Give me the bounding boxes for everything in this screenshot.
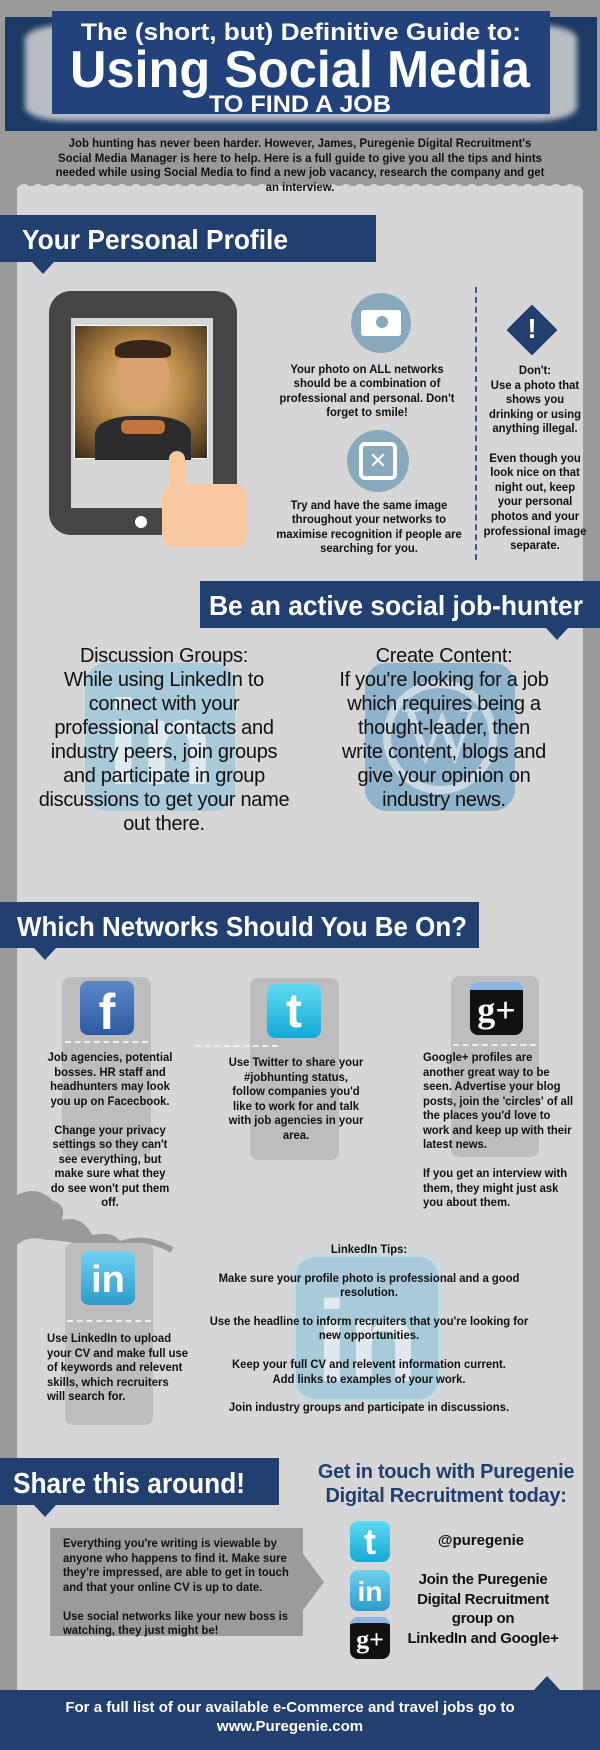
text: linkedin tips: resolution. [340,1285,398,1299]
linkedin block: skills, which recruiters [47,1374,169,1388]
text: don't: Use a photo that [491,378,579,392]
text: linkedin tips [210,1242,528,1414]
contact icons [350,1521,390,1659]
title text: The (short, but) Definitive Guide to: [81,19,521,46]
text: discussion groups: Discussion Groups: [80,645,248,667]
facebook block: make sure what they [55,1166,165,1180]
heading: get in touch [318,1461,574,1507]
icon: warning diamond [506,304,558,356]
icon: twitter small: t [364,1521,376,1562]
text: don't: shows you [506,392,564,406]
text: don't: look nice on that [490,465,580,479]
text: discussion groups: out there. [123,813,205,835]
text: photo combination: Your photo on ALL networks [290,362,444,376]
twitter block: #jobhunting status, [244,1070,348,1084]
google+ block: work and keep up with their [423,1122,572,1136]
title box [52,11,550,114]
title text [70,19,531,114]
text: discussion groups [39,645,289,835]
text: same image: searching for you. [320,541,418,555]
icon: twitter small [350,1521,390,1562]
intro text: an interview. [266,180,334,194]
text: linkedin tips: Join industry groups and participate in discussions. [229,1400,509,1414]
text: join group: Join the Puregenie [419,1571,547,1588]
twitter block: area. [283,1128,309,1142]
icon: google plus small: g+ [356,1625,384,1654]
twitter block: with job agencies in your [229,1113,363,1127]
text: don't: Even though you [489,451,581,465]
callout: share text box: they're impressed, are able to get in touch [63,1565,289,1579]
scalloped panel top [17,184,575,191]
callout: share text box: watching, they just might be! [63,1623,218,1637]
intro text: Job hunting has never been harder. However, James, Puregenie Digital Recruitment's [69,136,531,150]
photo [74,325,208,459]
google+ block: latest news. [423,1137,487,1151]
text: don't: drinking or using [489,407,581,421]
text: don't: professional image [484,524,586,538]
intro text: Social Media Manager is here to help. Here is a full guide to give you all the tips and hints [58,151,542,165]
text: same image: maximise recognition if people are [276,527,462,541]
twitter block: follow companies you'd [232,1084,360,1098]
text: create content: If you're looking for a job [339,669,549,691]
text: photo combination [279,362,455,419]
heading: Share this around [0,1458,279,1505]
divider dashed [475,287,477,560]
footer [0,1690,600,1750]
google+ block: Google+ profiles are [423,1050,532,1064]
linkedin block: will search for. [47,1389,125,1403]
callout: share text box [50,1528,324,1637]
facebook block: Change your privacy [54,1122,166,1136]
text: don't [484,363,586,552]
title text: Using Social Media [70,41,531,99]
footer: For a full list of our available e-Commerce and travel jobs go to [65,1699,515,1716]
icon: camera [351,293,411,353]
heading: Share this around: Share this around! [13,1468,245,1500]
heading: Your Personal Profile [0,215,376,262]
facebook block: off. [101,1195,119,1209]
facebook block: settings so they can't [53,1137,167,1151]
google+ block: you about them. [423,1195,510,1209]
icon: linkedin [81,1251,135,1305]
header banner [5,17,597,131]
icon: expand [347,430,409,492]
footer: www.Puregenie.com [217,1718,363,1735]
heading: get in touch: Digital Recruitment today: [325,1485,567,1507]
linkedin block: of keywords and relevent [47,1360,182,1374]
icon: twitter [267,984,321,1038]
text: don't: separate. [510,538,560,552]
intro text [56,136,544,194]
text: don't: photos and your [491,509,579,523]
text: don't: anything illegal. [492,421,578,435]
google+ block: posts, join the 'circles' of all [423,1094,573,1108]
icon bg: linkedin tips faint: in [316,1278,418,1406]
text: linkedin tips: Make sure your profile photo is professional and a good [219,1271,519,1285]
google+ block: them, they might just ask [423,1180,558,1194]
facebook block: see everything, but [59,1152,161,1166]
callout: share text box: and that your online CV is up to date. [63,1580,262,1594]
text: join group: Digital Recruitment [417,1590,549,1608]
decorative torn shape [17,1191,174,1252]
icon bg: linkedin faint [85,663,235,811]
icon bg: wordpress faint: W [402,692,478,780]
callout: share text box: Use social networks like your new boss is [63,1608,288,1622]
text: join group: group on [452,1610,514,1627]
google+ block: another great way to be [423,1064,550,1078]
text: create content: which requires being a [347,693,541,715]
google+ block: seen. Advertise your blog [423,1079,560,1093]
twitter block: Use Twitter to share your [229,1055,363,1069]
text: don't: Don't: [519,363,551,377]
icon: google plus: g+ [477,990,516,1030]
text: discussion groups: connect with your [89,693,239,715]
icon: expand: ✕ [369,448,387,473]
google+ block: the places you'd love to [423,1108,550,1122]
text: join group [407,1571,559,1646]
text: create content: write content, blogs and [342,741,546,763]
text: don't: your personal [498,494,572,508]
icon: warning diamond: ! [527,313,537,344]
icon: linkedin small [350,1570,390,1611]
text: create content: thought-leader, then [358,717,530,739]
heading: Be an active social job-hunter: Be an active social job-hunter [209,590,583,621]
icon: facebook [80,981,134,1035]
text: photo combination: forget to smile! [326,405,408,419]
icon: twitter: t [286,985,302,1038]
icon: linkedin small: in [358,1576,382,1607]
text: photo combination: professional and personal. Don't [279,391,455,405]
icon bg: wordpress faint [365,663,515,811]
facebook block: bosses. HR staff and [54,1064,166,1078]
linkedin block: your CV and make full use [47,1346,188,1360]
heading: Which Networks [0,902,479,948]
text: discussion groups: While using LinkedIn to [64,669,264,691]
text: same image: Try and have the same image [291,498,447,512]
text: linkedin tips: Keep your full CV and relevent information current. [232,1357,506,1371]
callout: share text box: anyone who happens to find it. Make sure [63,1550,287,1564]
text: discussion groups: and participate in group [63,765,265,787]
text: linkedin tips: Add links to examples of your work. [272,1372,466,1386]
facebook block: do see won't put them [51,1180,169,1194]
twitter block: like to work for and talk [233,1098,359,1112]
icon: linkedin: in [91,1259,125,1301]
linkedin block [47,1243,188,1425]
text: linkedin tips: LinkedIn Tips: [331,1242,407,1256]
callout: share text box: Everything you're writing is viewable by [63,1536,277,1550]
google+ block [423,976,573,1209]
icon: google plus [470,982,523,1035]
icon bg: linkedin tips faint [293,1254,441,1402]
text: linkedin tips: Use the headline to inform recruiters that you're looking for [210,1314,528,1328]
linkedin block: Use LinkedIn to upload [47,1331,171,1345]
text: discussion groups: discussions to get your name [39,789,289,811]
text: same image: throughout your networks to [292,512,446,526]
facebook block: Job agencies, potential [48,1050,172,1064]
text: discussion groups: industry peers, join groups [51,741,277,763]
intro text: needed while using Social Media to find a new job vacancy, research the company and get [56,165,544,179]
text: discussion groups: professional contacts and [54,717,274,739]
facebook block [48,977,172,1209]
heading: Be an active social job-hunter [200,581,600,628]
facebook block: you up on Facecbook. [50,1094,170,1108]
text: photo combination: should be a combination of [294,376,440,390]
text: @puregenie: @puregenie [438,1532,524,1549]
google+ block: If you get an interview with [423,1166,567,1180]
heading: Your Personal Profile: Your Personal Profile [22,224,288,255]
text: don't: night out, keep [495,480,575,494]
hand [169,451,185,511]
heading: get in touch: Get in touch with Puregenie [318,1461,574,1483]
icon: google plus small [350,1617,390,1659]
text: same image [276,498,462,555]
icon bg: linkedin faint: in [107,676,213,810]
text: create content: Create Content: [376,645,512,667]
text: create content: give your opinion on [357,765,530,787]
text: create content [339,645,549,811]
twitter block [195,978,364,1160]
text: linkedin tips: new opportunities. [319,1328,419,1342]
tablet illustration [49,291,247,547]
facebook block: headhunters may look [50,1079,170,1093]
text: join group: LinkedIn and Google+ [407,1630,559,1646]
text: create content: industry news. [382,789,506,811]
